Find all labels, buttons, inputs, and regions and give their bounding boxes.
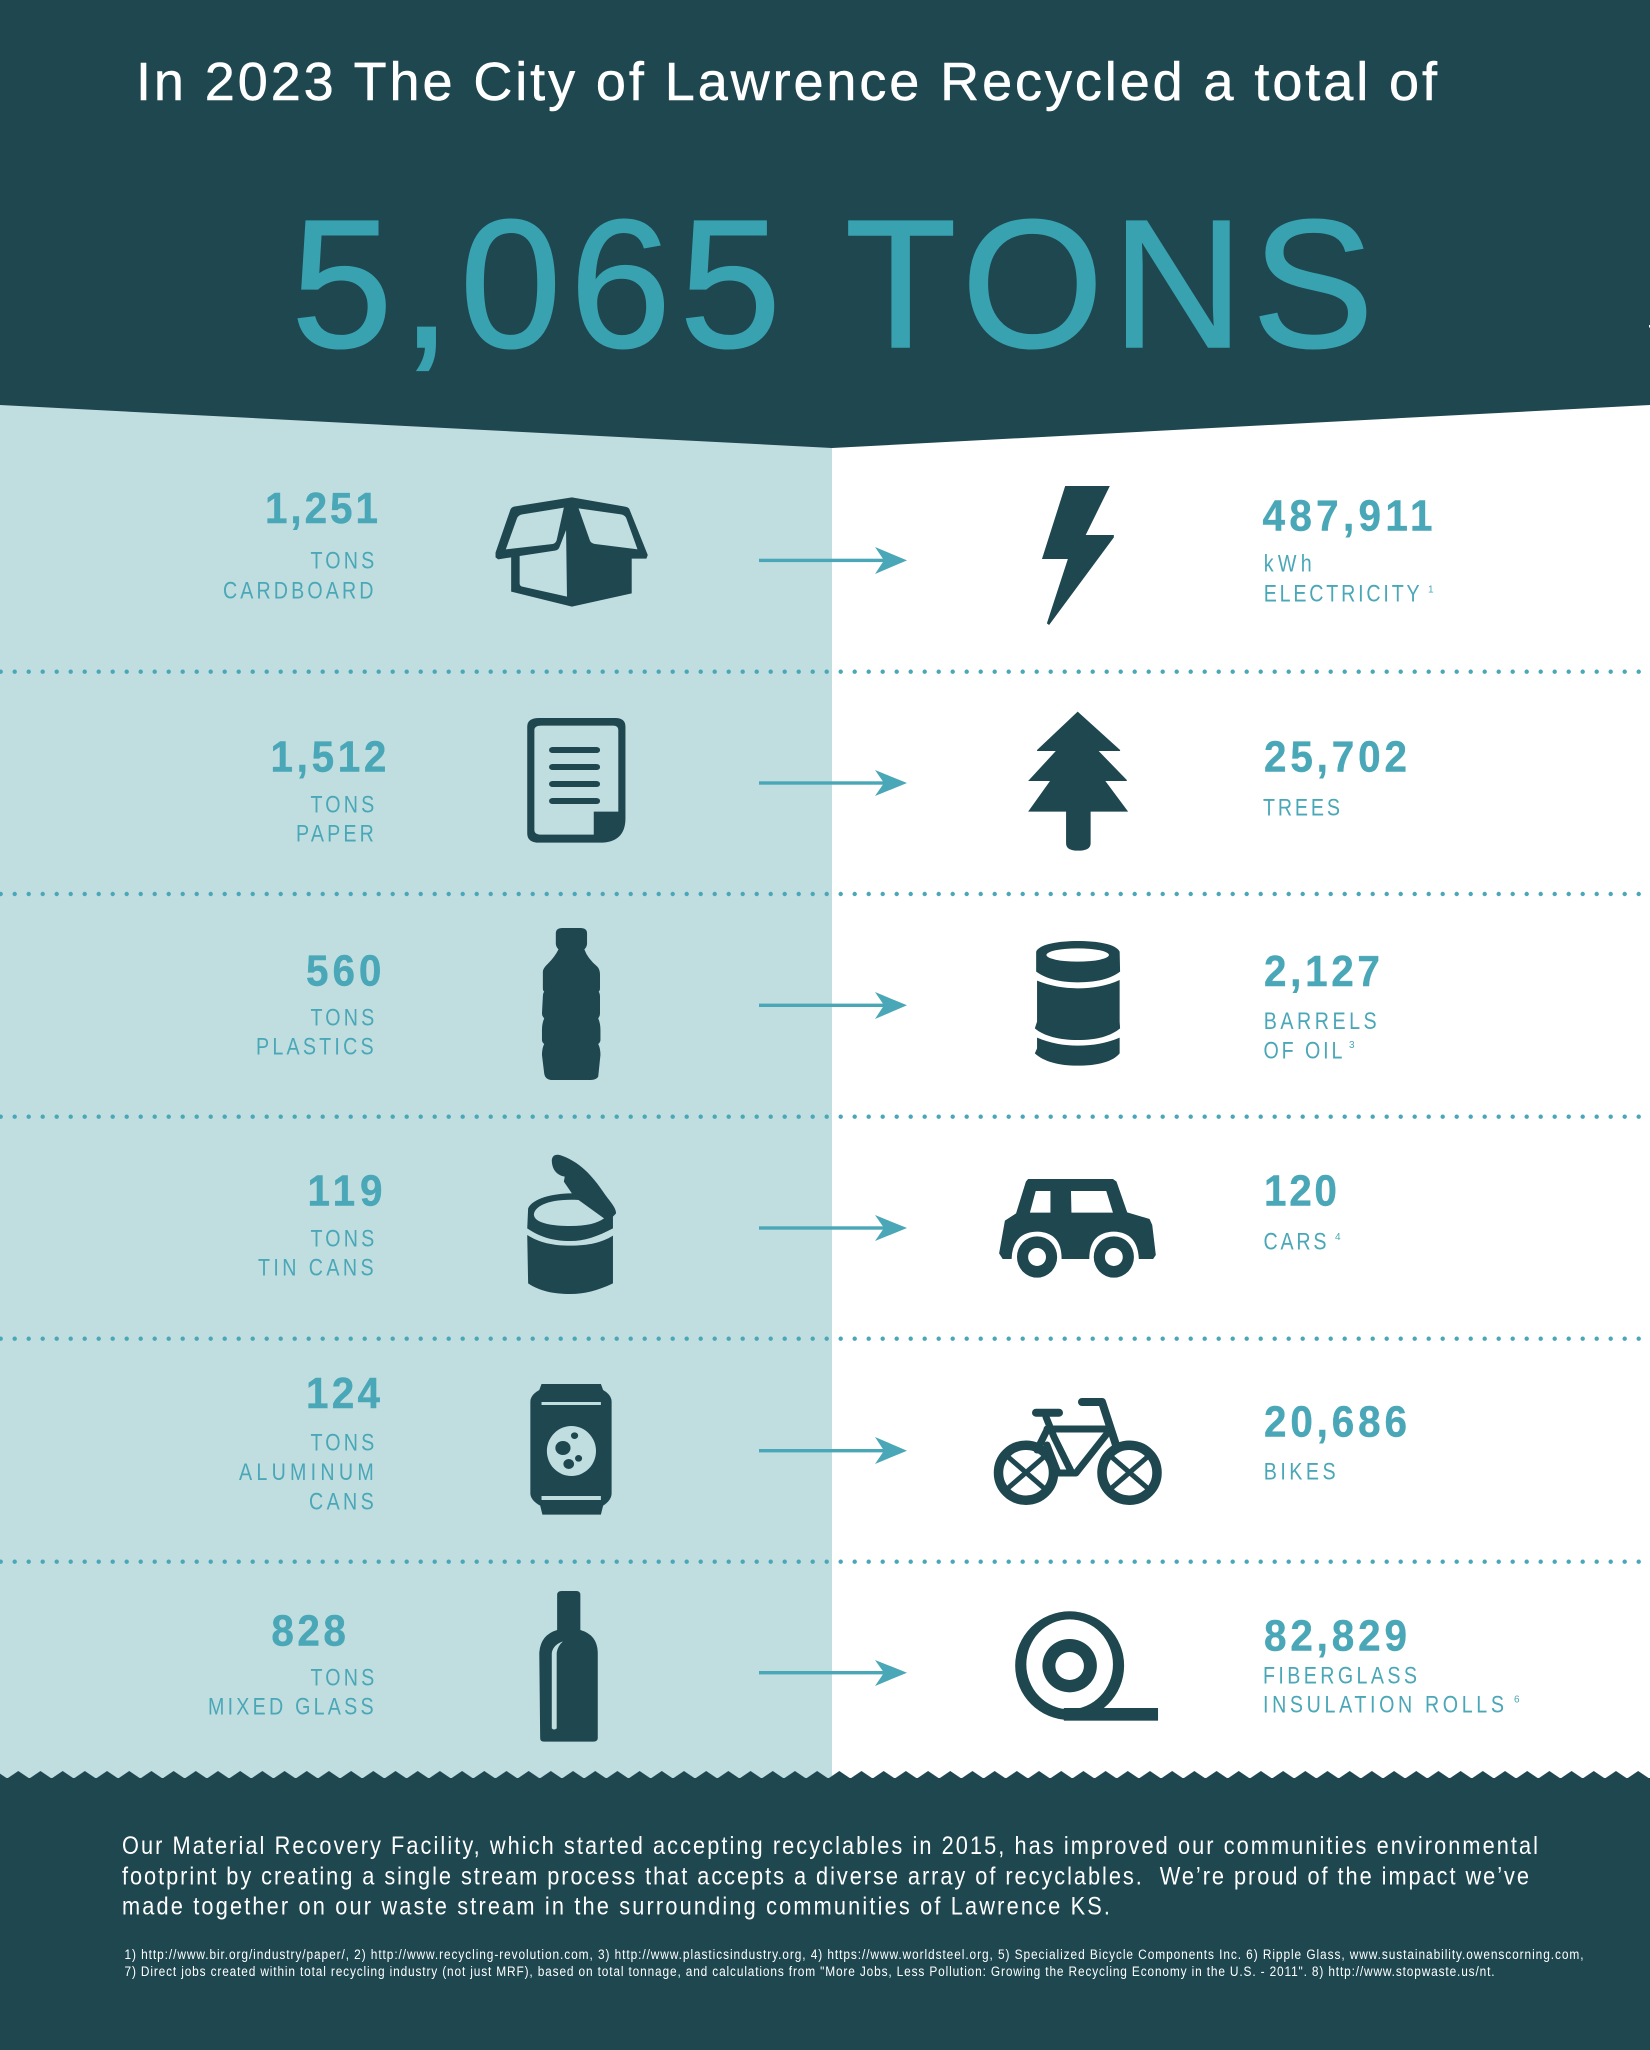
footnotes: 1) http://www.bir.org/industry/paper/, 2) http://www.recycling-revolution.com, 3) http://www.plasticsindustry.org, 4) https://www.worldsteel.org, 5) Specialized Bicycle Components Inc. 6) Ripple Glass, www.sustainability.owenscorning.com, bbox=[124, 1946, 1584, 1962]
row: cardboard to electricity bbox=[223, 483, 1434, 625]
plastics label: TONS bbox=[310, 1003, 374, 1031]
total tonnage: 5,065 TONS bbox=[291, 181, 1374, 386]
title: In 2023 The City of Lawrence Recycled a total of bbox=[136, 52, 1438, 112]
oil label: OF OIL bbox=[1264, 1036, 1342, 1064]
trees label: TREES bbox=[1263, 794, 1340, 821]
paper label: TONS bbox=[310, 790, 374, 818]
electricity label bbox=[1264, 550, 1434, 607]
cardboard tonnage: 1,251 bbox=[265, 483, 378, 532]
bikes label: BIKES bbox=[1264, 1457, 1336, 1485]
arrow bbox=[759, 1660, 907, 1686]
arrow bbox=[759, 1215, 907, 1241]
footer paragraph: Our Material Recovery Facility, which started accepting recyclables in 2015, has improved our communities environmental bbox=[122, 1832, 1538, 1859]
aluminum label: ALUMINUM bbox=[239, 1458, 374, 1485]
cars label: CARS bbox=[1264, 1227, 1326, 1255]
electricity label: ELECTRICITY bbox=[1264, 580, 1420, 607]
insulation label: FIBERGLASS bbox=[1263, 1661, 1417, 1689]
aluminum label bbox=[239, 1429, 374, 1515]
icon: cardboard box bbox=[496, 497, 648, 607]
footnotes bbox=[124, 1946, 1584, 1979]
tin cans tonnage: 119 bbox=[308, 1166, 382, 1215]
footer paragraph: footprint by creating a single stream process that accepts a diverse array of recyclables. We’re proud of the impact we’ve bbox=[122, 1862, 1529, 1890]
bikes saved value: 20,686 bbox=[1264, 1397, 1407, 1446]
plastics tonnage: 560 bbox=[306, 946, 381, 995]
arrow bbox=[759, 547, 907, 574]
oil saved value: 2,127 bbox=[1264, 946, 1380, 995]
row: plastics to oil bbox=[256, 928, 1380, 1080]
tin cans label: TONS bbox=[310, 1225, 374, 1252]
row: tin cans to cars bbox=[258, 1155, 1341, 1294]
glass label: TONS bbox=[310, 1663, 374, 1691]
footer background bbox=[0, 1778, 1650, 2050]
plastics label bbox=[256, 1003, 374, 1060]
footer zigzag edge bbox=[0, 1771, 1650, 1778]
electricity label: kWh bbox=[1264, 550, 1312, 577]
glass tonnage: 828 bbox=[271, 1606, 346, 1655]
electricity label: 1 bbox=[1428, 585, 1434, 596]
panel: light left column bbox=[0, 400, 832, 1780]
cardboard label: TONS bbox=[310, 546, 374, 574]
icon: bicycle bbox=[998, 1402, 1157, 1500]
icon: aluminum can bbox=[530, 1384, 612, 1515]
icon: pine tree bbox=[1028, 712, 1128, 851]
footer paragraph bbox=[122, 1832, 1538, 1920]
footnotes: 7) Direct jobs created within total recycling industry (not just MRF), based on total tonnage, and calculations from "More Jobs, Less Pollution: Growing the Recycling Economy in the U.S. - 2011". 8) http://www.stopwaste.us/nt. bbox=[124, 1963, 1495, 1979]
insulation label: INSULATION ROLLS bbox=[1263, 1691, 1504, 1718]
icon: tin can bbox=[527, 1155, 616, 1294]
glass label bbox=[208, 1663, 374, 1720]
icon: plastic bottle bbox=[542, 928, 600, 1080]
header background with chevron bbox=[0, 0, 1650, 448]
cardboard label: CARDBOARD bbox=[223, 576, 373, 604]
tin cans label: TIN CANS bbox=[258, 1254, 374, 1281]
paper label: PAPER bbox=[296, 820, 374, 847]
row: mixed glass to insulation bbox=[208, 1591, 1520, 1742]
icon: paper sheet bbox=[527, 718, 625, 843]
plastics label: PLASTICS bbox=[256, 1033, 374, 1060]
header panel bbox=[0, 0, 1650, 448]
tin cans label bbox=[258, 1225, 374, 1281]
icon: oil barrel bbox=[1035, 941, 1120, 1066]
cars label: 4 bbox=[1335, 1232, 1341, 1243]
icon: glass bottle bbox=[539, 1591, 598, 1742]
insulation label: 6 bbox=[1514, 1695, 1520, 1706]
arrow bbox=[759, 1437, 907, 1464]
electricity saved value: 487,911 bbox=[1262, 491, 1433, 540]
row: aluminum cans to bikes bbox=[239, 1368, 1407, 1515]
row: paper to trees bbox=[270, 712, 1407, 851]
glass label: MIXED GLASS bbox=[208, 1693, 374, 1720]
arrow bbox=[759, 992, 907, 1019]
aluminum label: TONS bbox=[310, 1429, 374, 1456]
icon: car bbox=[999, 1179, 1156, 1278]
aluminum label: CANS bbox=[309, 1487, 374, 1515]
cardboard label bbox=[223, 546, 374, 604]
footer paragraph: made together on our waste stream in the surrounding communities of Lawrence KS. bbox=[122, 1892, 1110, 1920]
icon: lightning bolt bbox=[1042, 486, 1114, 625]
insulation label bbox=[1263, 1661, 1520, 1718]
aluminum tonnage: 124 bbox=[306, 1368, 380, 1417]
arrow bbox=[759, 770, 907, 796]
paper tonnage: 1,512 bbox=[270, 732, 386, 781]
icon: insulation roll bbox=[1015, 1611, 1158, 1721]
oil label: 3 bbox=[1349, 1040, 1355, 1051]
cars saved value: 120 bbox=[1264, 1166, 1337, 1215]
paper label bbox=[296, 790, 374, 847]
trees saved value: 25,702 bbox=[1264, 732, 1407, 781]
oil label bbox=[1264, 1007, 1377, 1064]
insulation saved value: 82,829 bbox=[1264, 1611, 1407, 1660]
oil label: BARRELS bbox=[1264, 1007, 1377, 1034]
footer panel bbox=[0, 1771, 1650, 2050]
